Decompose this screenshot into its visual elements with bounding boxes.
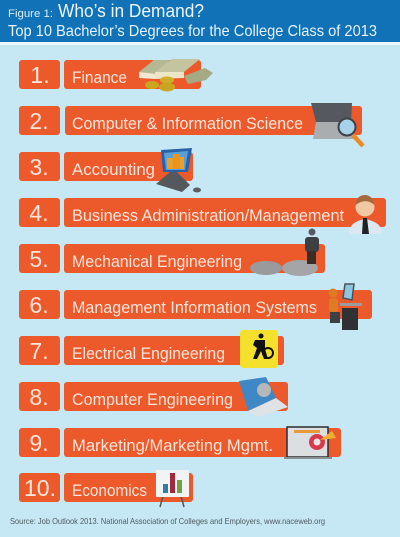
row 4: Business Administration/Management: Business Administration/Management xyxy=(72,207,344,225)
icon: laptop with gears xyxy=(239,377,288,417)
icon: computer with chart xyxy=(156,148,201,192)
row 8: Computer Engineering: Computer Engineering xyxy=(72,391,233,409)
row 2: Computer and Information Science: 2. xyxy=(29,108,49,134)
row 2: Computer and Information Science: Computer & Information Science xyxy=(72,115,303,133)
row 9: Marketing/Marketing Mgmt. xyxy=(19,427,341,459)
subtitle: Top 10 Bachelor’s Degrees for the College Class of 2013 xyxy=(8,23,377,40)
row 8: Computer Engineering xyxy=(19,377,288,417)
icon: presentation board with bars xyxy=(156,470,189,507)
row 3: Accounting xyxy=(19,148,201,192)
icon: businessman xyxy=(349,195,382,234)
icon: figure at workstation xyxy=(328,284,362,330)
row 8: Computer Engineering: 8. xyxy=(29,384,49,410)
row 10: Economics: 10. xyxy=(24,475,56,501)
row 6: Management Information Systems: 6. xyxy=(29,292,49,318)
row 1: Finance: 1. xyxy=(30,62,50,88)
source note: Source: Job Outlook 2013. National Association of Colleges and Employers, www.naceweb.org xyxy=(10,516,325,526)
row 9: Marketing/Marketing Mgmt.: Marketing/Marketing Mgmt. xyxy=(72,437,273,455)
row 6: Management Information Systems xyxy=(19,284,372,330)
row 6: Management Information Systems: Management Information Systems xyxy=(72,299,317,317)
row 10: Economics xyxy=(19,470,193,507)
row 5: Mechanical Engineering: Mechanical Engineering xyxy=(72,253,242,271)
header band xyxy=(0,0,400,45)
icon: person on gears xyxy=(250,228,319,276)
row 3: Accounting: 3. xyxy=(29,154,49,180)
row 1: Finance: Finance xyxy=(72,69,127,87)
row 7: Electrical Engineering: 7. xyxy=(29,338,49,364)
title: Who’s in Demand? xyxy=(58,1,204,21)
row 9: Marketing/Marketing Mgmt.: 9. xyxy=(29,430,49,456)
row 7: Electrical Engineering: Electrical Engineering xyxy=(72,345,225,363)
icon: yellow sign with worker xyxy=(240,330,278,368)
row 2: Computer and Information Science xyxy=(19,103,363,146)
row 4: Business Administration/Management xyxy=(19,195,386,234)
row 4: Business Administration/Management: 4. xyxy=(29,200,49,226)
row 10: Economics: Economics xyxy=(72,482,147,500)
row 5: Mechanical Engineering: 5. xyxy=(29,246,49,272)
row 5: Mechanical Engineering xyxy=(19,228,325,276)
icon: money and coins xyxy=(139,59,213,92)
figure label: Figure 1: xyxy=(8,8,53,20)
row 1: Finance xyxy=(19,59,213,92)
icon: tablet with target xyxy=(284,427,336,459)
row 3: Accounting: Accounting xyxy=(72,161,155,179)
row 7: Electrical Engineering xyxy=(19,330,284,368)
icon: laptop with magnifier xyxy=(311,103,363,146)
